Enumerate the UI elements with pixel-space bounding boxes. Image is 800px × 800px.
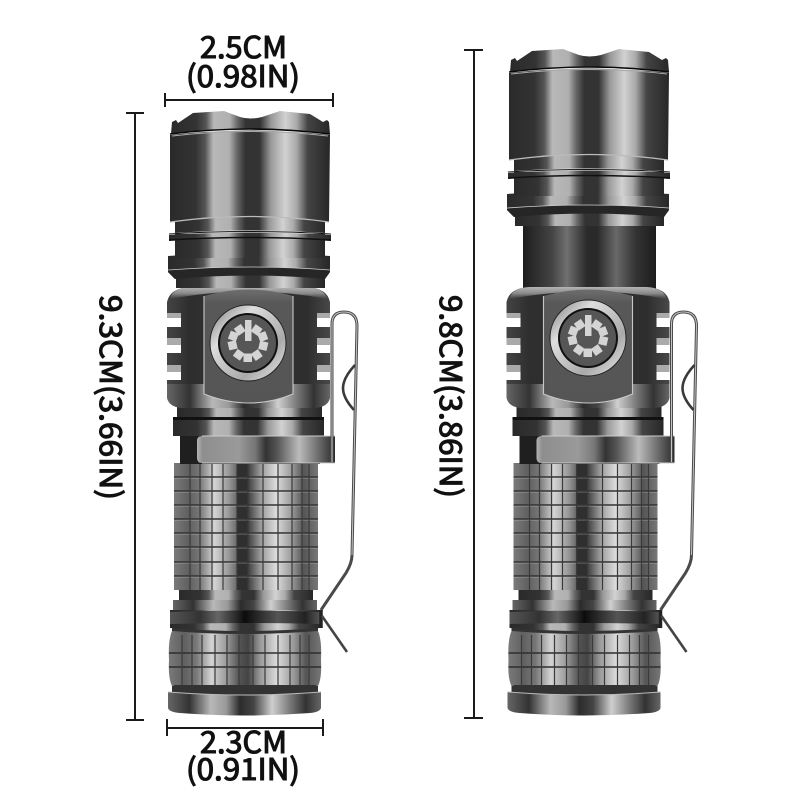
- pocket clip: [321, 312, 357, 652]
- bezel: [171, 111, 330, 134]
- power icon: [228, 320, 268, 362]
- dimension: short length line: [126, 113, 144, 720]
- dimension: head width line: [165, 93, 333, 107]
- label: extended length: 9.8CM(3.86IN): [431, 295, 475, 498]
- label: tail width: 2.3CM: [200, 718, 287, 762]
- label: tail width: [186, 718, 300, 789]
- tail section: [168, 463, 321, 716]
- knurled grip: [174, 463, 318, 590]
- dimension: tail width line: [167, 719, 323, 736]
- power button: [550, 300, 626, 376]
- label: tail width: (0.91IN): [186, 745, 300, 789]
- tail cap: [168, 685, 321, 716]
- switch block: [166, 287, 331, 408]
- pocket clip: [660, 312, 696, 652]
- label: short length: 9.3CM(3.66IN): [91, 295, 135, 500]
- label: head width: [186, 23, 300, 96]
- flashlight: short (left): [166, 111, 357, 716]
- body ring and clip band: [512, 404, 674, 464]
- switch plate: [204, 290, 293, 403]
- flashlight: extended (right): [506, 49, 696, 716]
- tail rings: [170, 590, 320, 698]
- cooling fins: [166, 313, 331, 380]
- tail section: [508, 463, 661, 716]
- label: head width: 2.5CM: [200, 23, 287, 67]
- body ring and clip band: [173, 404, 335, 464]
- dimension: extended length line: [464, 50, 483, 718]
- switch block: [506, 287, 670, 408]
- label: head width: (0.98IN): [186, 52, 300, 96]
- head section: [168, 111, 331, 288]
- head section: [507, 49, 670, 226]
- tail knurl: [169, 631, 321, 686]
- exposed neck tube: [523, 222, 656, 290]
- power button: [210, 305, 286, 381]
